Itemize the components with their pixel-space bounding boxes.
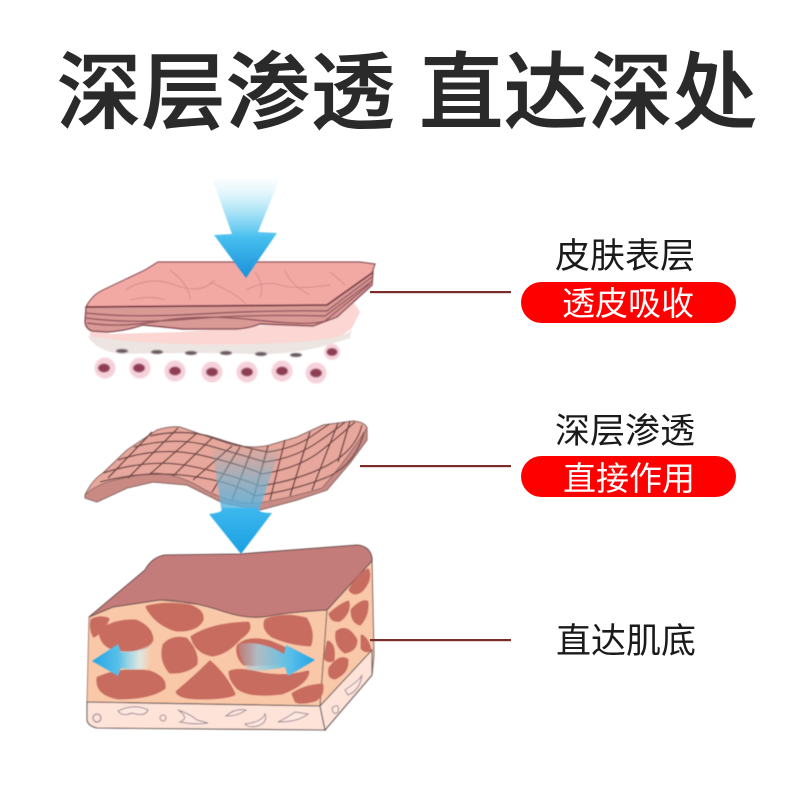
title: 深层渗透 直达深处	[57, 46, 757, 140]
illustration: deep layer mesh	[85, 421, 367, 514]
white fatty band	[88, 328, 352, 354]
arrow: second downward	[209, 508, 272, 554]
block side face	[320, 560, 374, 730]
pill: direct action: 直接作用	[563, 460, 695, 497]
pill: transdermal absorption	[521, 282, 736, 323]
top face	[89, 545, 372, 617]
pink tissue under the surface layer	[90, 300, 360, 348]
mesh sheet	[85, 421, 367, 510]
top face	[86, 262, 375, 307]
illustration: deep tissue block	[87, 545, 374, 730]
cells row	[94, 344, 340, 384]
leader line: deep tissue	[370, 639, 511, 641]
fat cell outlines	[118, 675, 362, 727]
layered front edge	[85, 272, 373, 332]
arrow: first downward	[212, 178, 280, 278]
mesh grid lines	[100, 422, 364, 496]
label: deep tissue: 直达肌底	[556, 622, 696, 661]
fat base layer	[87, 702, 325, 730]
base side	[320, 650, 372, 730]
block front face	[87, 600, 327, 706]
blue light in mesh	[212, 448, 280, 514]
label: skin surface: 皮肤表层	[555, 237, 695, 276]
pill: transdermal absorption: 透皮吸收	[562, 285, 694, 322]
mesh front edge	[85, 428, 367, 510]
illustration: skin surface layer	[85, 262, 375, 384]
surface cracks	[125, 270, 345, 305]
arrow: left sideways	[92, 642, 152, 676]
label: deep layer: 深层渗透	[555, 412, 695, 451]
leader line: skin surface	[370, 291, 511, 293]
arrow: right sideways	[238, 643, 315, 676]
pill: direct action	[521, 456, 736, 497]
muscle bundles	[91, 570, 370, 702]
leader line: deep layer	[360, 465, 511, 467]
